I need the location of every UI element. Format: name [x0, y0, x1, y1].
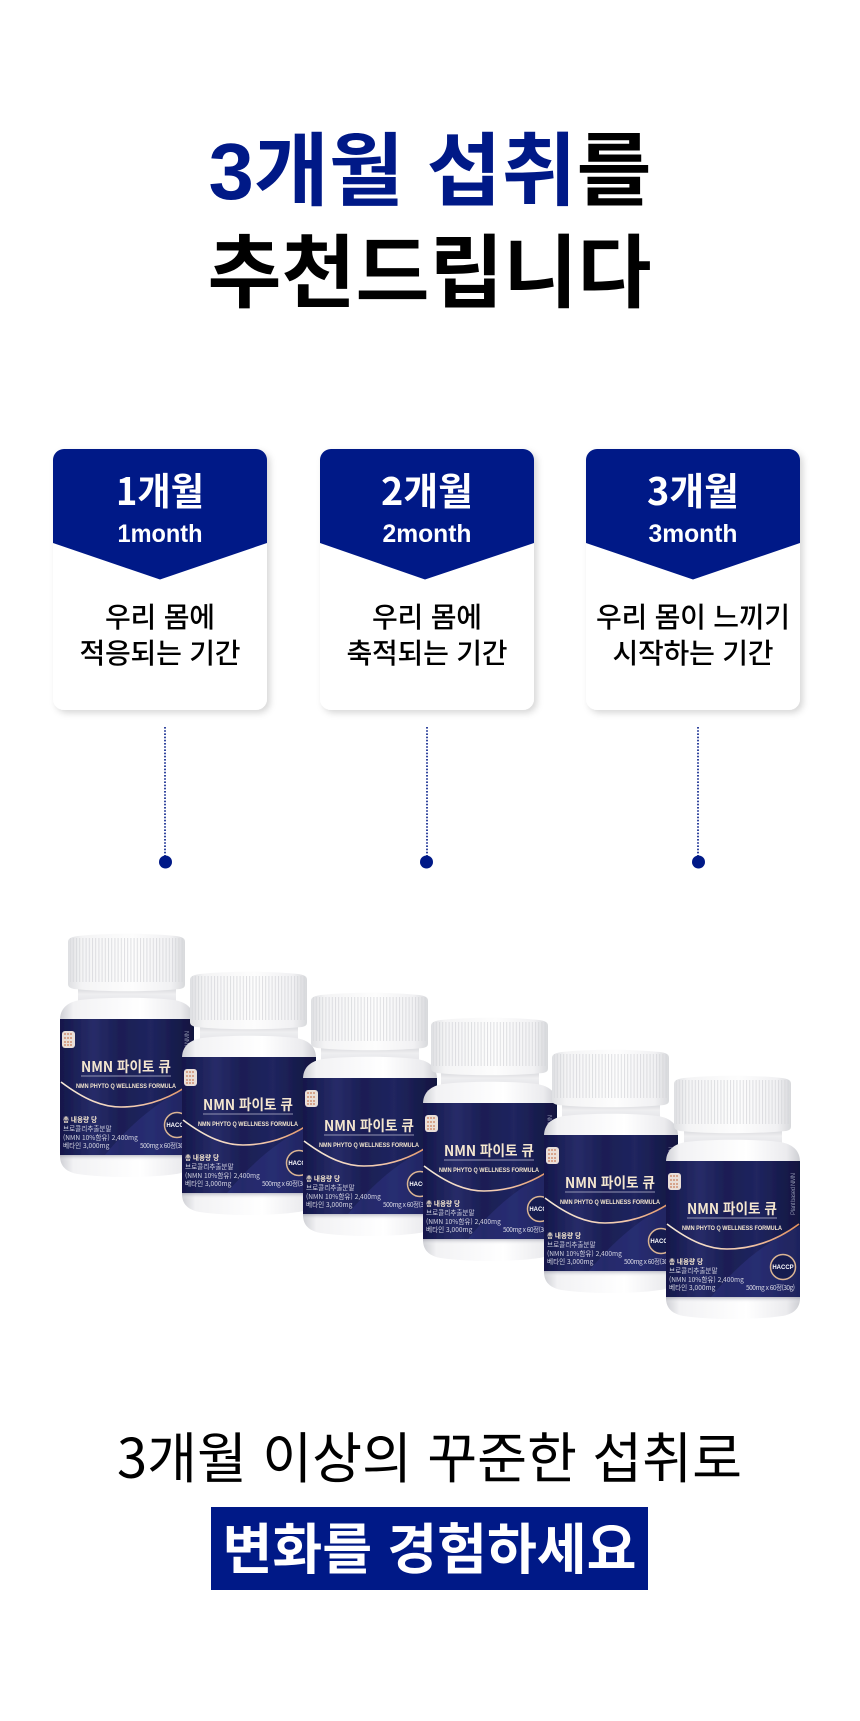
bottle 6: 총 내용량 당 [669, 1256, 703, 1266]
bottle 1: Plant based NMN [185, 1031, 191, 1073]
panel: month 3 card: 3month [648, 520, 738, 548]
bottle 3: NMN PHYTO Q WELLNESS FORMULA [319, 1142, 419, 1149]
bottle 6 [666, 1076, 800, 1319]
bottle 2: Plant based NMN [307, 1069, 313, 1111]
bottle 5: 브로콜리추출분말 [547, 1239, 596, 1249]
panel: month 1 card: 우리 몸에 [105, 596, 215, 636]
bottle 3 [303, 993, 437, 1236]
bottle 3: 베타인 3,000mg [306, 1199, 353, 1209]
panel: month 2 card [320, 449, 534, 710]
bottle 4 [423, 1018, 557, 1261]
panel: month 2 card: 2개월 [381, 461, 473, 516]
panel: month 2 card: 2month [382, 520, 472, 548]
bottle 1: 500mg x 60정(30g) [140, 1140, 189, 1150]
panel: month 1 card: 1month [118, 520, 202, 548]
closing highlight box: 변화를 경험하세요 [222, 1505, 636, 1585]
panel: month 3 card: 시작하는 기간 [612, 632, 774, 672]
bottle 1: 베타인 3,000mg [63, 1140, 110, 1150]
closing text line: 3개월 이상의 꾸준한 섭취로 [117, 1414, 742, 1494]
bottle 1: HACCP [166, 1123, 188, 1129]
panel: month 3 card: 3개월 [647, 461, 739, 516]
bottle 3: (NMN 10%함유) 2,400mg [306, 1191, 381, 1201]
bottle 2: 브로콜리추출분말 [185, 1161, 234, 1171]
panel: month 1 card: 1개월 [116, 461, 204, 516]
bottle 2: 총 내용량 당 [185, 1152, 219, 1162]
bottle 4: 총 내용량 당 [426, 1198, 460, 1208]
bottle 6: (NMN 10%함유) 2,400mg [669, 1274, 744, 1284]
bottle 5: 베타인 3,000mg [547, 1256, 594, 1266]
bottle 5: NMN 파이토 큐 [565, 1172, 655, 1193]
title line 1: 3개월 섭취를 [208, 127, 652, 216]
panel: month 1 card: 적응되는 기간 [80, 632, 240, 672]
bottle 4: NMN 파이토 큐 [444, 1140, 534, 1161]
panel: month 3 card [586, 449, 800, 710]
bottle 4: 브로콜리추출분말 [426, 1207, 475, 1217]
bottle 3: HACCP [409, 1182, 431, 1188]
bottle 6: Plant based NMN [791, 1173, 797, 1215]
bottle 5: (NMN 10%함유) 2,400mg [547, 1248, 622, 1258]
bottle 5: Plant based NMN [669, 1147, 675, 1189]
title [208, 127, 652, 318]
bottle 2 [182, 972, 316, 1215]
bottle 4: Plant based NMN [548, 1115, 554, 1157]
bottle 3: 브로콜리추출분말 [306, 1182, 355, 1192]
panel: month 1 card [53, 449, 267, 710]
panel: month 2 card: 우리 몸에 [372, 596, 482, 636]
bottle 3: NMN 파이토 큐 [324, 1115, 414, 1136]
bottle 2: HACCP [288, 1161, 310, 1167]
bottle 1: 총 내용량 당 [63, 1114, 97, 1124]
bottle 5: 500mg x 60정(30g) [624, 1256, 673, 1266]
bottle 5 [544, 1050, 678, 1293]
bottle 6: NMN 파이토 큐 [687, 1198, 777, 1219]
bottle 4: HACCP [529, 1207, 551, 1213]
bottle 5: HACCP [650, 1239, 672, 1245]
bottle 3: Plant based NMN [428, 1090, 434, 1132]
bottle 5: NMN PHYTO Q WELLNESS FORMULA [560, 1199, 660, 1206]
bottle 2: (NMN 10%함유) 2,400mg [185, 1170, 260, 1180]
bottle 6: 브로콜리추출분말 [669, 1265, 718, 1275]
bottle 1 [60, 934, 194, 1177]
bottle 3: 총 내용량 당 [306, 1173, 340, 1183]
bottle 3: 500mg x 60정(30g) [383, 1199, 432, 1209]
bottle 6: HACCP [772, 1265, 794, 1271]
bottle 6: 500mg x 60정(30g) [746, 1282, 795, 1292]
bottle 1: 브로콜리추출분말 [63, 1123, 112, 1133]
bottle 4: 베타인 3,000mg [426, 1224, 473, 1234]
title line 2: 추천드립니다 [208, 229, 652, 318]
bottle 2: NMN PHYTO Q WELLNESS FORMULA [198, 1121, 298, 1128]
panel: month 3 card: 우리 몸이 느끼기 [596, 596, 790, 636]
bottle 1: NMN 파이토 큐 [81, 1056, 171, 1077]
bottle 2: 500mg x 60정(30g) [262, 1178, 311, 1188]
connector: month 3 [692, 727, 705, 868]
bottle 2: NMN 파이토 큐 [203, 1094, 293, 1115]
bottle 4: (NMN 10%함유) 2,400mg [426, 1216, 501, 1226]
bottle 1: (NMN 10%함유) 2,400mg [63, 1132, 138, 1142]
bottle 4: NMN PHYTO Q WELLNESS FORMULA [439, 1167, 539, 1174]
connector: month 2 [420, 727, 433, 868]
bottle 1: NMN PHYTO Q WELLNESS FORMULA [76, 1083, 176, 1090]
connector: month 1 [159, 727, 172, 868]
bottle 6: 베타인 3,000mg [669, 1282, 716, 1292]
bottle 4: 500mg x 60정(30g) [503, 1224, 552, 1234]
bottle 2: 베타인 3,000mg [185, 1178, 232, 1188]
bottle 6: NMN PHYTO Q WELLNESS FORMULA [682, 1225, 782, 1232]
panel: month 2 card: 축적되는 기간 [346, 632, 508, 672]
bottle 5: 총 내용량 당 [547, 1230, 581, 1240]
